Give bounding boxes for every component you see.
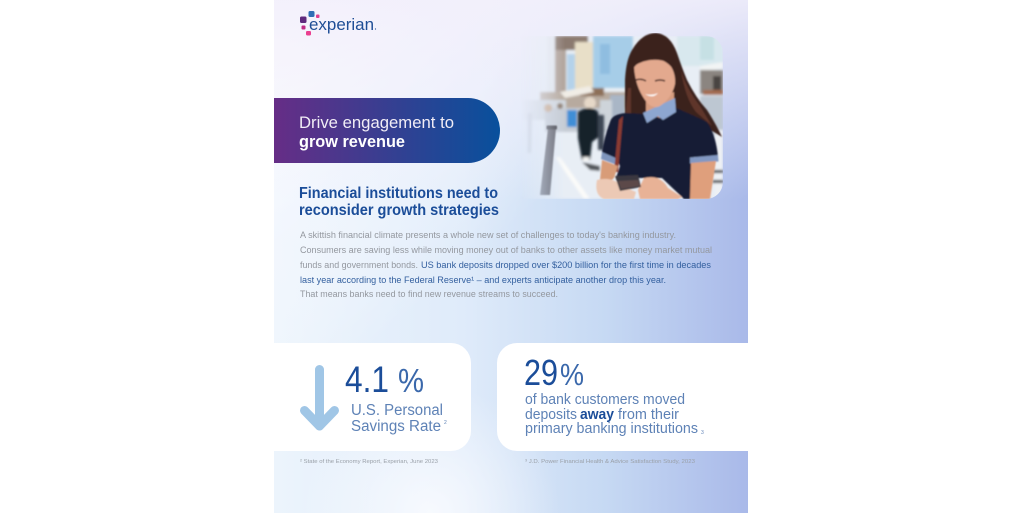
footnote 3: ³ J.D. Power Financial Health & Advice Satisfaction Study, 2023: [525, 459, 695, 465]
banner: drive engagement: grow revenue: [299, 133, 405, 151]
stat label: 2: [444, 420, 447, 426]
body paragraph: That means banks need to find new revenue streams to succeed.: [300, 289, 558, 299]
logo: Experian: [300, 11, 376, 36]
stat card: moved deposits: [497, 343, 748, 451]
body paragraph: A skittish financial climate presents a whole new set of challenges to today's banking industry.: [300, 230, 676, 240]
body paragraph: Consumers are saving less while moving money out of banks to other assets like money market mutual: [300, 245, 712, 255]
hair back: [620, 33, 722, 143]
stat card: savings rate: [274, 343, 471, 451]
stat label: Savings Rate: [351, 418, 441, 435]
eyes and mouth: [636, 79, 646, 81]
stat label: [525, 391, 704, 437]
footnote 2: ² State of the Economy Report, Experian, June 2023: [300, 459, 438, 465]
stat label: primary banking institutions: [525, 420, 698, 437]
stat label: deposits: [525, 406, 577, 423]
bag strap: [614, 116, 623, 172]
sleeve cuffs: [601, 152, 618, 165]
body paragraph: [300, 230, 712, 299]
stat card: moved deposits: %: [560, 357, 584, 392]
photo: woman looking at phone on a street: [510, 33, 723, 200]
heading: Financial institutions need to: [299, 185, 498, 202]
face: [634, 60, 675, 107]
stat label: away: [580, 406, 615, 423]
arms and hands: [599, 160, 619, 180]
phone: [615, 175, 641, 191]
banner: drive engagement: [274, 98, 500, 163]
infographic page: [274, 0, 748, 513]
heading: [299, 185, 499, 219]
stat label: U.S. Personal: [351, 402, 443, 419]
stat label: of bank customers moved: [525, 391, 685, 408]
navy dress: [602, 108, 718, 199]
stat label: from their: [618, 406, 679, 423]
stat value: 29: [524, 352, 558, 393]
street scene: [510, 36, 723, 200]
woman: [596, 33, 722, 199]
collar: [643, 98, 676, 123]
background person: [578, 97, 604, 161]
logo: Experian: experian: [309, 15, 374, 34]
hair front: [632, 60, 672, 68]
body paragraph: funds and government bonds.: [300, 260, 418, 270]
body paragraph: last year according to the Federal Reserve¹ – and experts anticipate another drop this year.: [300, 275, 666, 285]
background panel: [274, 0, 748, 513]
bollard post: [540, 126, 557, 195]
neck: [646, 92, 674, 118]
stat label: 3: [701, 430, 704, 436]
icon: down arrow: [304, 370, 334, 426]
stat card: savings rate: %: [398, 362, 424, 399]
body paragraph: US bank deposits dropped over $200 billion for the first time in decades: [421, 260, 712, 270]
banner: drive engagement: Drive engagement to: [299, 113, 454, 132]
stat value: 4.1: [345, 359, 389, 400]
heading: reconsider growth strategies: [299, 202, 499, 219]
stat label: [351, 402, 447, 435]
